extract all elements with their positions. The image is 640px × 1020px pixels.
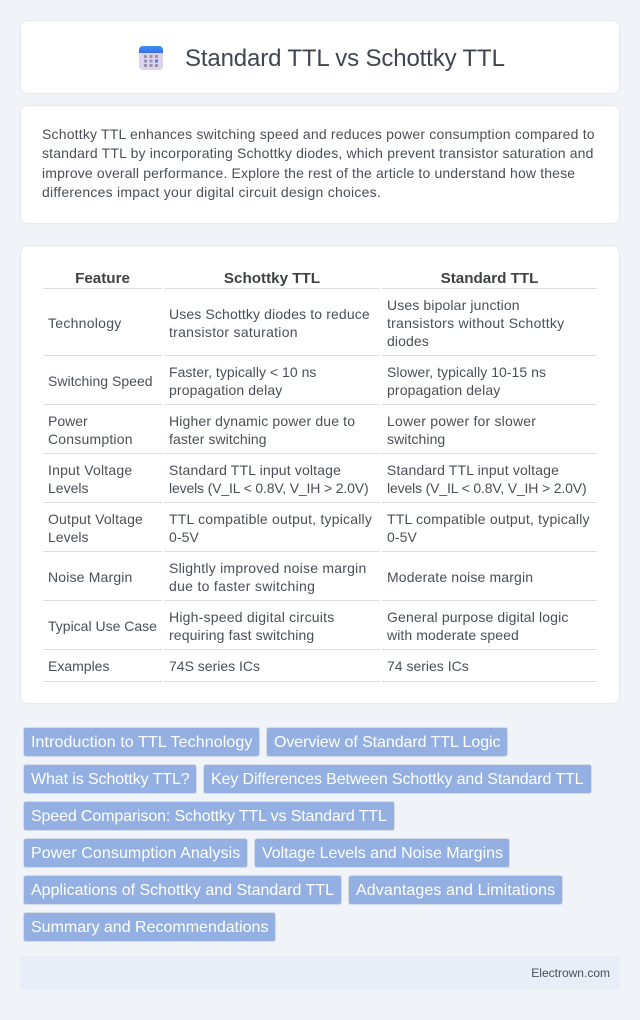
table row: power consumption: switching bbox=[387, 431, 445, 447]
text block: introduction: improve overall performance. Explore the rest of the article to understand how these bbox=[42, 165, 575, 181]
table row: typical use case: requiring fast switching bbox=[169, 627, 314, 643]
table row: technology: transistor saturation bbox=[169, 324, 298, 340]
tag: Power Consumption Analysis bbox=[31, 845, 240, 862]
tag bbox=[23, 875, 342, 905]
text block: introduction: standard TTL by incorporating Schottky diodes, which prevent transistor saturation and bbox=[42, 145, 594, 161]
table row: technology: Technology bbox=[48, 315, 122, 331]
table row: power consumption: Lower power for slower bbox=[387, 413, 536, 429]
table row: input voltage levels: Levels bbox=[48, 480, 88, 496]
table row: switching speed: propagation delay bbox=[169, 382, 282, 398]
table row: power consumption: faster switching bbox=[169, 431, 267, 447]
table row: noise margin: Slightly improved noise margin bbox=[169, 560, 367, 576]
panel: introduction bbox=[20, 105, 620, 224]
tag bbox=[203, 764, 592, 794]
table row: input voltage levels: levels (V_IL < 0.8V, V_IH > 2.0V) bbox=[169, 480, 368, 496]
table row: input voltage levels: levels (V_IL < 0.8V, V_IH > 2.0V) bbox=[387, 480, 586, 496]
table row: output voltage levels bbox=[48, 511, 590, 545]
table header: Standard TTL bbox=[441, 270, 538, 287]
table row: output voltage levels: TTL compatible output, typically bbox=[169, 511, 372, 527]
tag bbox=[23, 801, 395, 831]
tag: Voltage Levels and Noise Margins bbox=[262, 845, 503, 862]
table row: output voltage levels: 0-5V bbox=[169, 529, 199, 545]
panel: header bbox=[20, 20, 620, 94]
text block: introduction bbox=[42, 126, 595, 200]
table row: switching speed bbox=[48, 364, 546, 398]
table row: noise margin: due to faster switching bbox=[169, 578, 315, 594]
table row: power consumption: Higher dynamic power due to bbox=[169, 413, 355, 429]
text block: introduction: differences impact your digital circuit design choices. bbox=[42, 184, 381, 200]
table row: typical use case: with moderate speed bbox=[387, 627, 519, 643]
footer bbox=[20, 956, 620, 990]
table row: examples bbox=[48, 658, 469, 674]
tag: Overview of Standard TTL Logic bbox=[274, 734, 500, 751]
panel: comparison table bbox=[20, 245, 620, 704]
table row: typical use case: General purpose digital logic bbox=[387, 609, 569, 625]
table header: Schottky TTL bbox=[224, 270, 320, 287]
table row: output voltage levels: TTL compatible output, typically bbox=[387, 511, 590, 527]
tag bbox=[23, 912, 276, 942]
table row: switching speed: Slower, typically 10-15 ns bbox=[387, 364, 546, 380]
table header bbox=[75, 270, 538, 287]
tag: Speed Comparison: Schottky TTL vs Standard TTL bbox=[31, 808, 387, 825]
table row: output voltage levels: 0-5V bbox=[387, 529, 417, 545]
table header: Feature bbox=[75, 270, 130, 287]
tag: Introduction to TTL Technology bbox=[31, 734, 253, 751]
tag bbox=[254, 838, 510, 868]
table row: typical use case bbox=[48, 609, 569, 643]
table row: switching speed: Faster, typically < 10 ns bbox=[169, 364, 316, 380]
tag bbox=[266, 727, 508, 757]
tag: What is Schottky TTL? bbox=[31, 771, 190, 788]
table row: power consumption: Consumption bbox=[48, 431, 133, 447]
tag bbox=[23, 727, 260, 757]
table row: output voltage levels: Levels bbox=[48, 529, 88, 545]
table row: typical use case: Typical Use Case bbox=[48, 618, 157, 634]
table row: technology: transistors without Schottky bbox=[387, 315, 564, 331]
tag: Advantages and Limitations bbox=[356, 882, 555, 899]
tag: Summary and Recommendations bbox=[31, 919, 268, 936]
table row: output voltage levels: Output Voltage bbox=[48, 511, 143, 527]
table row: technology bbox=[48, 297, 564, 349]
tag: Key Differences Between Schottky and Standard TTL bbox=[211, 771, 583, 788]
footer credit: Electrown.com bbox=[531, 966, 610, 980]
panel: related topics bbox=[23, 727, 592, 942]
table row: examples: 74S series ICs bbox=[169, 658, 260, 674]
table row: input voltage levels: Standard TTL input voltage bbox=[169, 462, 341, 478]
table row: power consumption bbox=[48, 413, 536, 447]
table row: technology: Uses bipolar junction bbox=[387, 297, 520, 313]
table row: input voltage levels: Input Voltage bbox=[48, 462, 132, 478]
text block: introduction: Schottky TTL enhances switching speed and reduces power consumption compared to bbox=[42, 126, 595, 142]
tag bbox=[23, 838, 248, 868]
tag bbox=[348, 875, 563, 905]
table row: input voltage levels: Standard TTL input voltage bbox=[387, 462, 559, 478]
table row: typical use case: High-speed digital circuits bbox=[169, 609, 334, 625]
table row: power consumption: Power bbox=[48, 413, 88, 429]
table row: noise margin: Noise Margin bbox=[48, 569, 133, 585]
tag: Applications of Schottky and Standard TTL bbox=[31, 882, 334, 899]
icon: calendar bbox=[139, 46, 163, 70]
table row: examples: Examples bbox=[48, 658, 109, 674]
table row: technology: diodes bbox=[387, 333, 429, 349]
table row: examples: 74 series ICs bbox=[387, 658, 469, 674]
tag bbox=[23, 764, 197, 794]
title: Standard TTL vs Schottky TTL bbox=[185, 45, 505, 72]
table row: noise margin: Moderate noise margin bbox=[387, 569, 533, 585]
table row: input voltage levels bbox=[48, 462, 586, 496]
table row: switching speed: propagation delay bbox=[387, 382, 500, 398]
table row: switching speed: Switching Speed bbox=[48, 373, 153, 389]
table row: noise margin bbox=[48, 560, 533, 594]
table row: technology: Uses Schottky diodes to reduce bbox=[169, 306, 370, 322]
